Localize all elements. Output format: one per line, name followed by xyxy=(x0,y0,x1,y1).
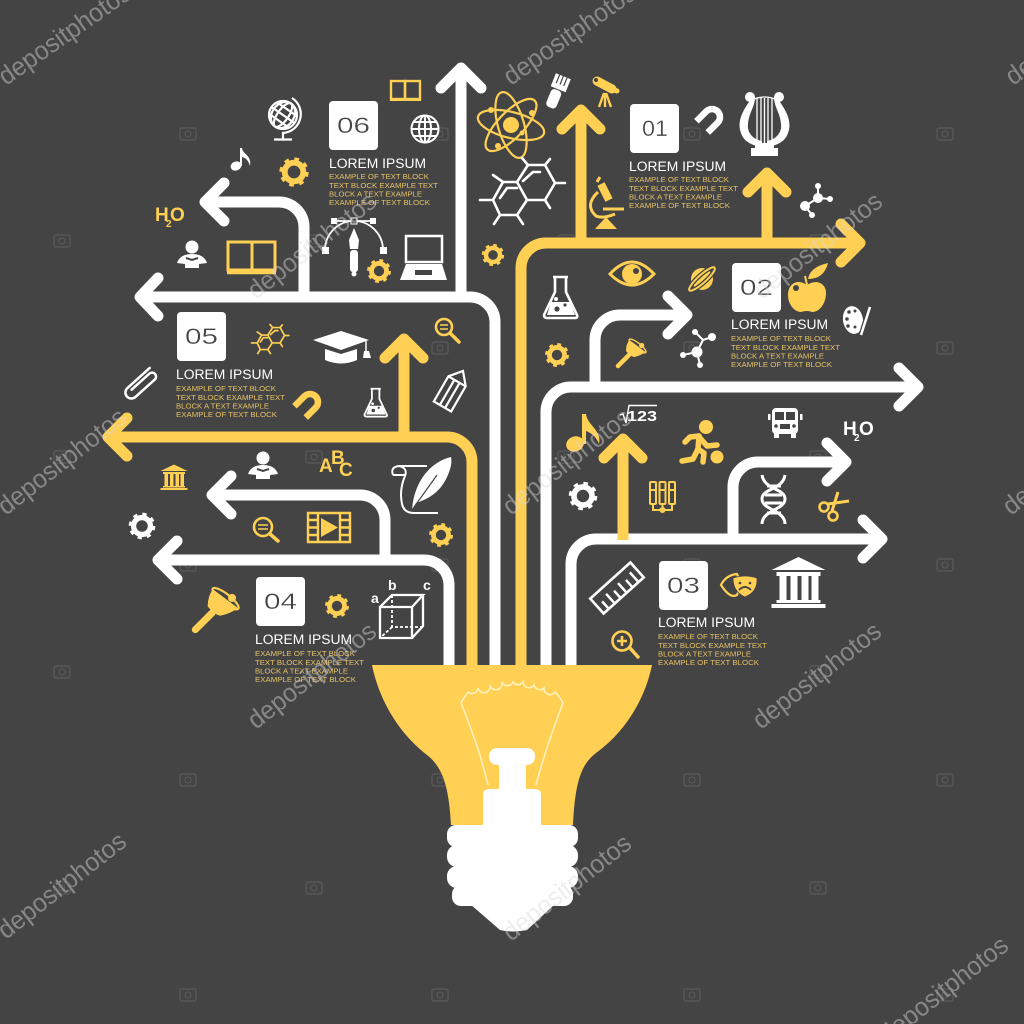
icon: bank large xyxy=(772,557,826,608)
bulb screw base xyxy=(447,748,578,932)
icon: grid globe xyxy=(412,116,438,142)
text 04: EXAMPLE OF TEXT BLOCK xyxy=(255,677,356,684)
arrow: left yellow trunk xyxy=(112,437,472,668)
arrow: top-left main branch xyxy=(142,297,495,668)
block 04 xyxy=(255,577,365,684)
number 02: 02 xyxy=(740,275,773,300)
block 01 xyxy=(629,104,739,210)
arrow: yellow up short xyxy=(762,175,772,243)
icon: apple xyxy=(788,263,828,312)
arrow head: right short xyxy=(668,296,687,334)
badge 02 xyxy=(732,263,781,312)
badge 06 xyxy=(329,101,378,150)
icon: music note yellow xyxy=(564,414,599,454)
icon: pencil xyxy=(434,366,472,411)
filament xyxy=(461,682,563,785)
arrow: right yellow trunk xyxy=(521,243,858,668)
block 06 xyxy=(329,101,439,207)
icon: ABC letters: C xyxy=(339,460,353,481)
icon: magnet white xyxy=(696,106,723,133)
icon: gear xyxy=(483,245,503,265)
badge 03 xyxy=(659,561,708,610)
icon: gear white xyxy=(571,484,595,508)
text 04: EXAMPLE OF TEXT BLOCK xyxy=(255,651,355,658)
text 02: TEXT BLOCK EXAMPLE TEXT xyxy=(731,345,841,352)
number 01: 01 xyxy=(642,116,668,141)
icon: gear xyxy=(431,525,451,545)
icon: flask large xyxy=(544,277,577,318)
icon: film strip xyxy=(308,513,350,542)
icon: graduation cap xyxy=(313,331,371,364)
heading 02: LOREM IPSUM xyxy=(731,317,828,332)
icon: hex molecule yellow xyxy=(252,324,289,354)
formula: root 123: 123 xyxy=(627,408,657,425)
icon: magnet yellow xyxy=(294,391,321,418)
icon: H2O white: H xyxy=(843,419,857,440)
text 04: TEXT BLOCK EXAMPLE TEXT xyxy=(255,660,365,667)
watermarks: depositphotos xyxy=(241,616,382,735)
icon: magnifier upper xyxy=(436,319,459,342)
icon: magnifier lower xyxy=(254,518,278,541)
heading 03: LOREM IPSUM xyxy=(658,615,755,630)
text 06: BLOCK A TEXT EXAMPLE xyxy=(329,192,422,198)
arrow: yellow up tall xyxy=(576,112,586,243)
icon: gear xyxy=(369,261,389,281)
watermarks: depositphotos xyxy=(747,186,888,305)
arrow head: lower right short xyxy=(827,443,846,481)
icon: reader xyxy=(177,240,207,268)
text 02: BLOCK A TEXT EXAMPLE xyxy=(731,354,824,360)
icon: bell large xyxy=(195,585,241,630)
block 03 xyxy=(658,561,768,667)
arrow: lower left short branch xyxy=(215,495,385,560)
icon: scroll and feather xyxy=(392,457,451,513)
text 05: BLOCK A TEXT EXAMPLE xyxy=(176,404,269,410)
arrow: lower left branch xyxy=(160,560,449,668)
icon: cube abc: b xyxy=(388,577,397,593)
watermarks: depositphotos xyxy=(496,828,637,947)
text 04: BLOCK A TEXT EXAMPLE xyxy=(255,668,348,676)
block 02 xyxy=(731,263,841,369)
arrow head: lower right xyxy=(863,520,882,558)
text 03: BLOCK A TEXT EXAMPLE xyxy=(658,652,751,658)
arrow head: yellow up short xyxy=(748,173,786,192)
text 01: TEXT BLOCK EXAMPLE TEXT xyxy=(629,186,739,193)
text 05: TEXT BLOCK EXAMPLE TEXT xyxy=(176,395,286,402)
arrow: lower right short branch xyxy=(733,462,843,539)
icon: molecule upper right xyxy=(800,183,833,218)
icon: globe on stand xyxy=(264,96,302,140)
icon: H2O white xyxy=(843,419,874,444)
text 01: EXAMPLE OF TEXT BLOCK xyxy=(629,203,730,210)
watermarks: depositphotos xyxy=(746,616,887,735)
icon: H2O yellow xyxy=(155,205,185,230)
icon: molecule middle xyxy=(680,329,716,368)
icon: ABC letters: A xyxy=(319,456,333,477)
text 03: EXAMPLE OF TEXT BLOCK xyxy=(658,660,759,667)
arrow head: main left xyxy=(140,278,158,316)
icon: bell small xyxy=(618,337,648,366)
arrow head: yellow up left xyxy=(385,339,423,358)
icon: gear xyxy=(547,345,567,365)
arrow head: yellow up lower right xyxy=(604,439,642,458)
icon: ABC letters: B xyxy=(331,448,345,469)
heading 05: LOREM IPSUM xyxy=(176,367,273,382)
icon: laptop xyxy=(400,236,447,280)
icon: saturn xyxy=(687,265,717,293)
watermarks: depositphotos xyxy=(496,402,637,521)
icon: organ pipes xyxy=(650,482,675,512)
icon: microscope xyxy=(590,177,624,229)
text 05 xyxy=(176,386,286,419)
arrow head: yellow up tall xyxy=(562,110,600,129)
text 03: TEXT BLOCK EXAMPLE TEXT xyxy=(658,643,768,650)
arrow head: upper vertical xyxy=(441,68,481,88)
formula: root 123 xyxy=(620,406,657,425)
white branch arrows xyxy=(140,68,918,668)
icon: eye xyxy=(610,262,654,285)
text 06: EXAMPLE OF TEXT BLOCK xyxy=(329,174,429,181)
arrow: yellow up lower right xyxy=(618,442,628,540)
watermark cameras xyxy=(54,128,953,1001)
number 06: 06 xyxy=(337,113,370,138)
heading 01: LOREM IPSUM xyxy=(629,159,726,174)
icon: cube abc: a xyxy=(371,590,379,606)
text 02: EXAMPLE OF TEXT BLOCK xyxy=(731,362,832,369)
icon: hex molecule white xyxy=(480,158,565,224)
arrow head: branch left xyxy=(205,183,224,221)
icon: brush xyxy=(543,73,571,111)
icon: ABC letters xyxy=(319,448,353,481)
icon: H2O yellow: 2 xyxy=(166,219,172,230)
icon: scissors xyxy=(820,492,849,520)
icon: theatre masks xyxy=(721,574,757,597)
number 03: 03 xyxy=(667,573,700,598)
text 05: EXAMPLE OF TEXT BLOCK xyxy=(176,386,276,393)
icon: small book xyxy=(390,81,421,100)
icon: DNA xyxy=(762,475,785,524)
badge 01 xyxy=(630,104,679,153)
arrow: upper vertical xyxy=(456,70,466,297)
heading 04: LOREM IPSUM xyxy=(255,632,352,647)
icon: open book large xyxy=(227,242,276,272)
icon: cube abc xyxy=(371,577,431,638)
icon: atom xyxy=(475,89,547,161)
text 03: EXAMPLE OF TEXT BLOCK xyxy=(658,634,758,641)
text 03 xyxy=(658,634,768,667)
arrow head: lower left short xyxy=(212,476,231,514)
icon: H2O white: 2 xyxy=(854,433,860,444)
arrow: yellow up left xyxy=(398,342,410,437)
text 05: EXAMPLE OF TEXT BLOCK xyxy=(176,412,277,419)
icon: gear white xyxy=(130,514,154,538)
arrow: right short branch xyxy=(595,315,684,387)
icon: telescope xyxy=(594,78,617,107)
block 05 xyxy=(176,312,286,419)
text 01: BLOCK A TEXT EXAMPLE xyxy=(629,194,722,202)
arrow head: right long xyxy=(899,368,918,406)
text 06: EXAMPLE OF TEXT BLOCK xyxy=(329,200,430,207)
arrow head: lower left xyxy=(158,541,177,579)
badge 04 xyxy=(256,577,305,626)
text 01 xyxy=(629,177,739,210)
icon: ruler xyxy=(590,563,644,613)
arrow: lower right branch xyxy=(571,539,878,668)
text 06 xyxy=(329,174,439,207)
arrow: branch to the left, H2O xyxy=(208,202,304,297)
icon: magnifier plus xyxy=(612,632,638,657)
text 02 xyxy=(731,336,841,369)
icon: palette xyxy=(841,304,870,336)
arrow head: left yellow xyxy=(108,418,127,456)
icon: gear xyxy=(281,159,307,185)
icon: cube abc: c xyxy=(423,577,431,593)
icon: reader lower xyxy=(248,452,278,479)
badge 05 xyxy=(177,312,226,361)
number 04: 04 xyxy=(264,589,297,614)
bulb glass xyxy=(372,665,652,825)
light bulb xyxy=(372,665,652,932)
icon: H2O white: O xyxy=(859,419,874,440)
icon: music note white xyxy=(229,148,250,172)
text 02: EXAMPLE OF TEXT BLOCK xyxy=(731,336,831,343)
text 04 xyxy=(255,651,365,684)
heading 06: LOREM IPSUM xyxy=(329,156,426,171)
text 01: EXAMPLE OF TEXT BLOCK xyxy=(629,177,729,184)
icon: H2O yellow: H xyxy=(155,205,169,226)
arrow: right long branch xyxy=(546,387,914,668)
arrow head: right yellow xyxy=(841,224,860,262)
icon: runner with ball xyxy=(682,420,724,464)
icon: lyre xyxy=(740,92,789,156)
yellow branch arrows xyxy=(108,110,860,668)
watermarks: depositphotos xyxy=(241,186,382,305)
icon: gear xyxy=(327,596,347,616)
icon: school bus xyxy=(768,408,802,438)
number 05: 05 xyxy=(185,324,218,349)
icon: paperclip xyxy=(123,368,158,401)
icon: pen tool xyxy=(322,218,387,276)
text 06: TEXT BLOCK EXAMPLE TEXT xyxy=(329,183,439,190)
icon: small bank xyxy=(160,464,188,490)
icon: flask small xyxy=(364,389,387,417)
icon: H2O yellow: O xyxy=(170,205,185,226)
